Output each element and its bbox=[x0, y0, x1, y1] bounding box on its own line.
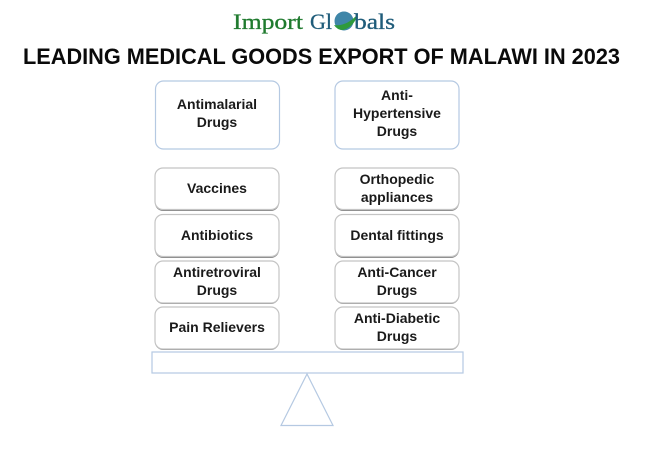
card: Antiretroviral Drugs: Antiretroviral bbox=[173, 264, 261, 280]
card: Antiretroviral Drugs: Drugs bbox=[197, 282, 237, 298]
card: Pain Relievers bbox=[155, 307, 279, 350]
card: Antibiotics bbox=[155, 214, 279, 258]
card: Vaccines bbox=[155, 168, 279, 211]
card: Pain Relievers: Pain Relievers bbox=[169, 319, 265, 335]
card: Anti-Diabetic Drugs bbox=[335, 307, 459, 350]
logo: Import Globals: Import bbox=[233, 9, 303, 34]
card: Dental fittings: Dental fittings bbox=[350, 227, 444, 243]
card: Orthopedic appliances bbox=[335, 168, 459, 211]
card: Anti-Cancer Drugs: Anti-Cancer bbox=[357, 264, 437, 280]
card: Anti-Diabetic Drugs: Drugs bbox=[377, 328, 417, 344]
logo: Import Globals bbox=[233, 9, 395, 34]
top box: Antimalarial Drugs bbox=[156, 81, 280, 149]
card: Antibiotics: Antibiotics bbox=[181, 227, 253, 243]
logo: Import Globals: Gl bbox=[310, 9, 332, 34]
card: Orthopedic appliances: appliances bbox=[361, 189, 433, 205]
card: Dental fittings bbox=[335, 214, 459, 258]
top box: Antimalarial Drugs: Antimalarial bbox=[177, 96, 257, 112]
top box: Anti-Hypertensive Drugs: Anti- bbox=[381, 87, 413, 103]
card: Orthopedic appliances: Orthopedic bbox=[360, 171, 435, 187]
top box: Anti-Hypertensive Drugs: Hypertensive bbox=[353, 105, 441, 121]
top box: Anti-Hypertensive Drugs: Drugs bbox=[377, 123, 417, 139]
card: Anti-Cancer Drugs: Drugs bbox=[377, 282, 417, 298]
card: Antiretroviral Drugs bbox=[155, 261, 279, 304]
logo: Import Globals: bals bbox=[354, 9, 395, 34]
card: Anti-Cancer Drugs bbox=[335, 261, 459, 304]
card: Vaccines: Vaccines bbox=[187, 180, 247, 196]
top box: Antimalarial Drugs: Drugs bbox=[197, 114, 237, 130]
title: LEADING MEDICAL GOODS EXPORT OF MALAWI IN 2023 bbox=[23, 44, 620, 69]
scale fulcrum triangle bbox=[281, 374, 333, 426]
top box: Anti-Hypertensive Drugs bbox=[335, 81, 459, 149]
scale beam bbox=[152, 352, 463, 373]
card: Anti-Diabetic Drugs: Anti-Diabetic bbox=[354, 310, 440, 326]
